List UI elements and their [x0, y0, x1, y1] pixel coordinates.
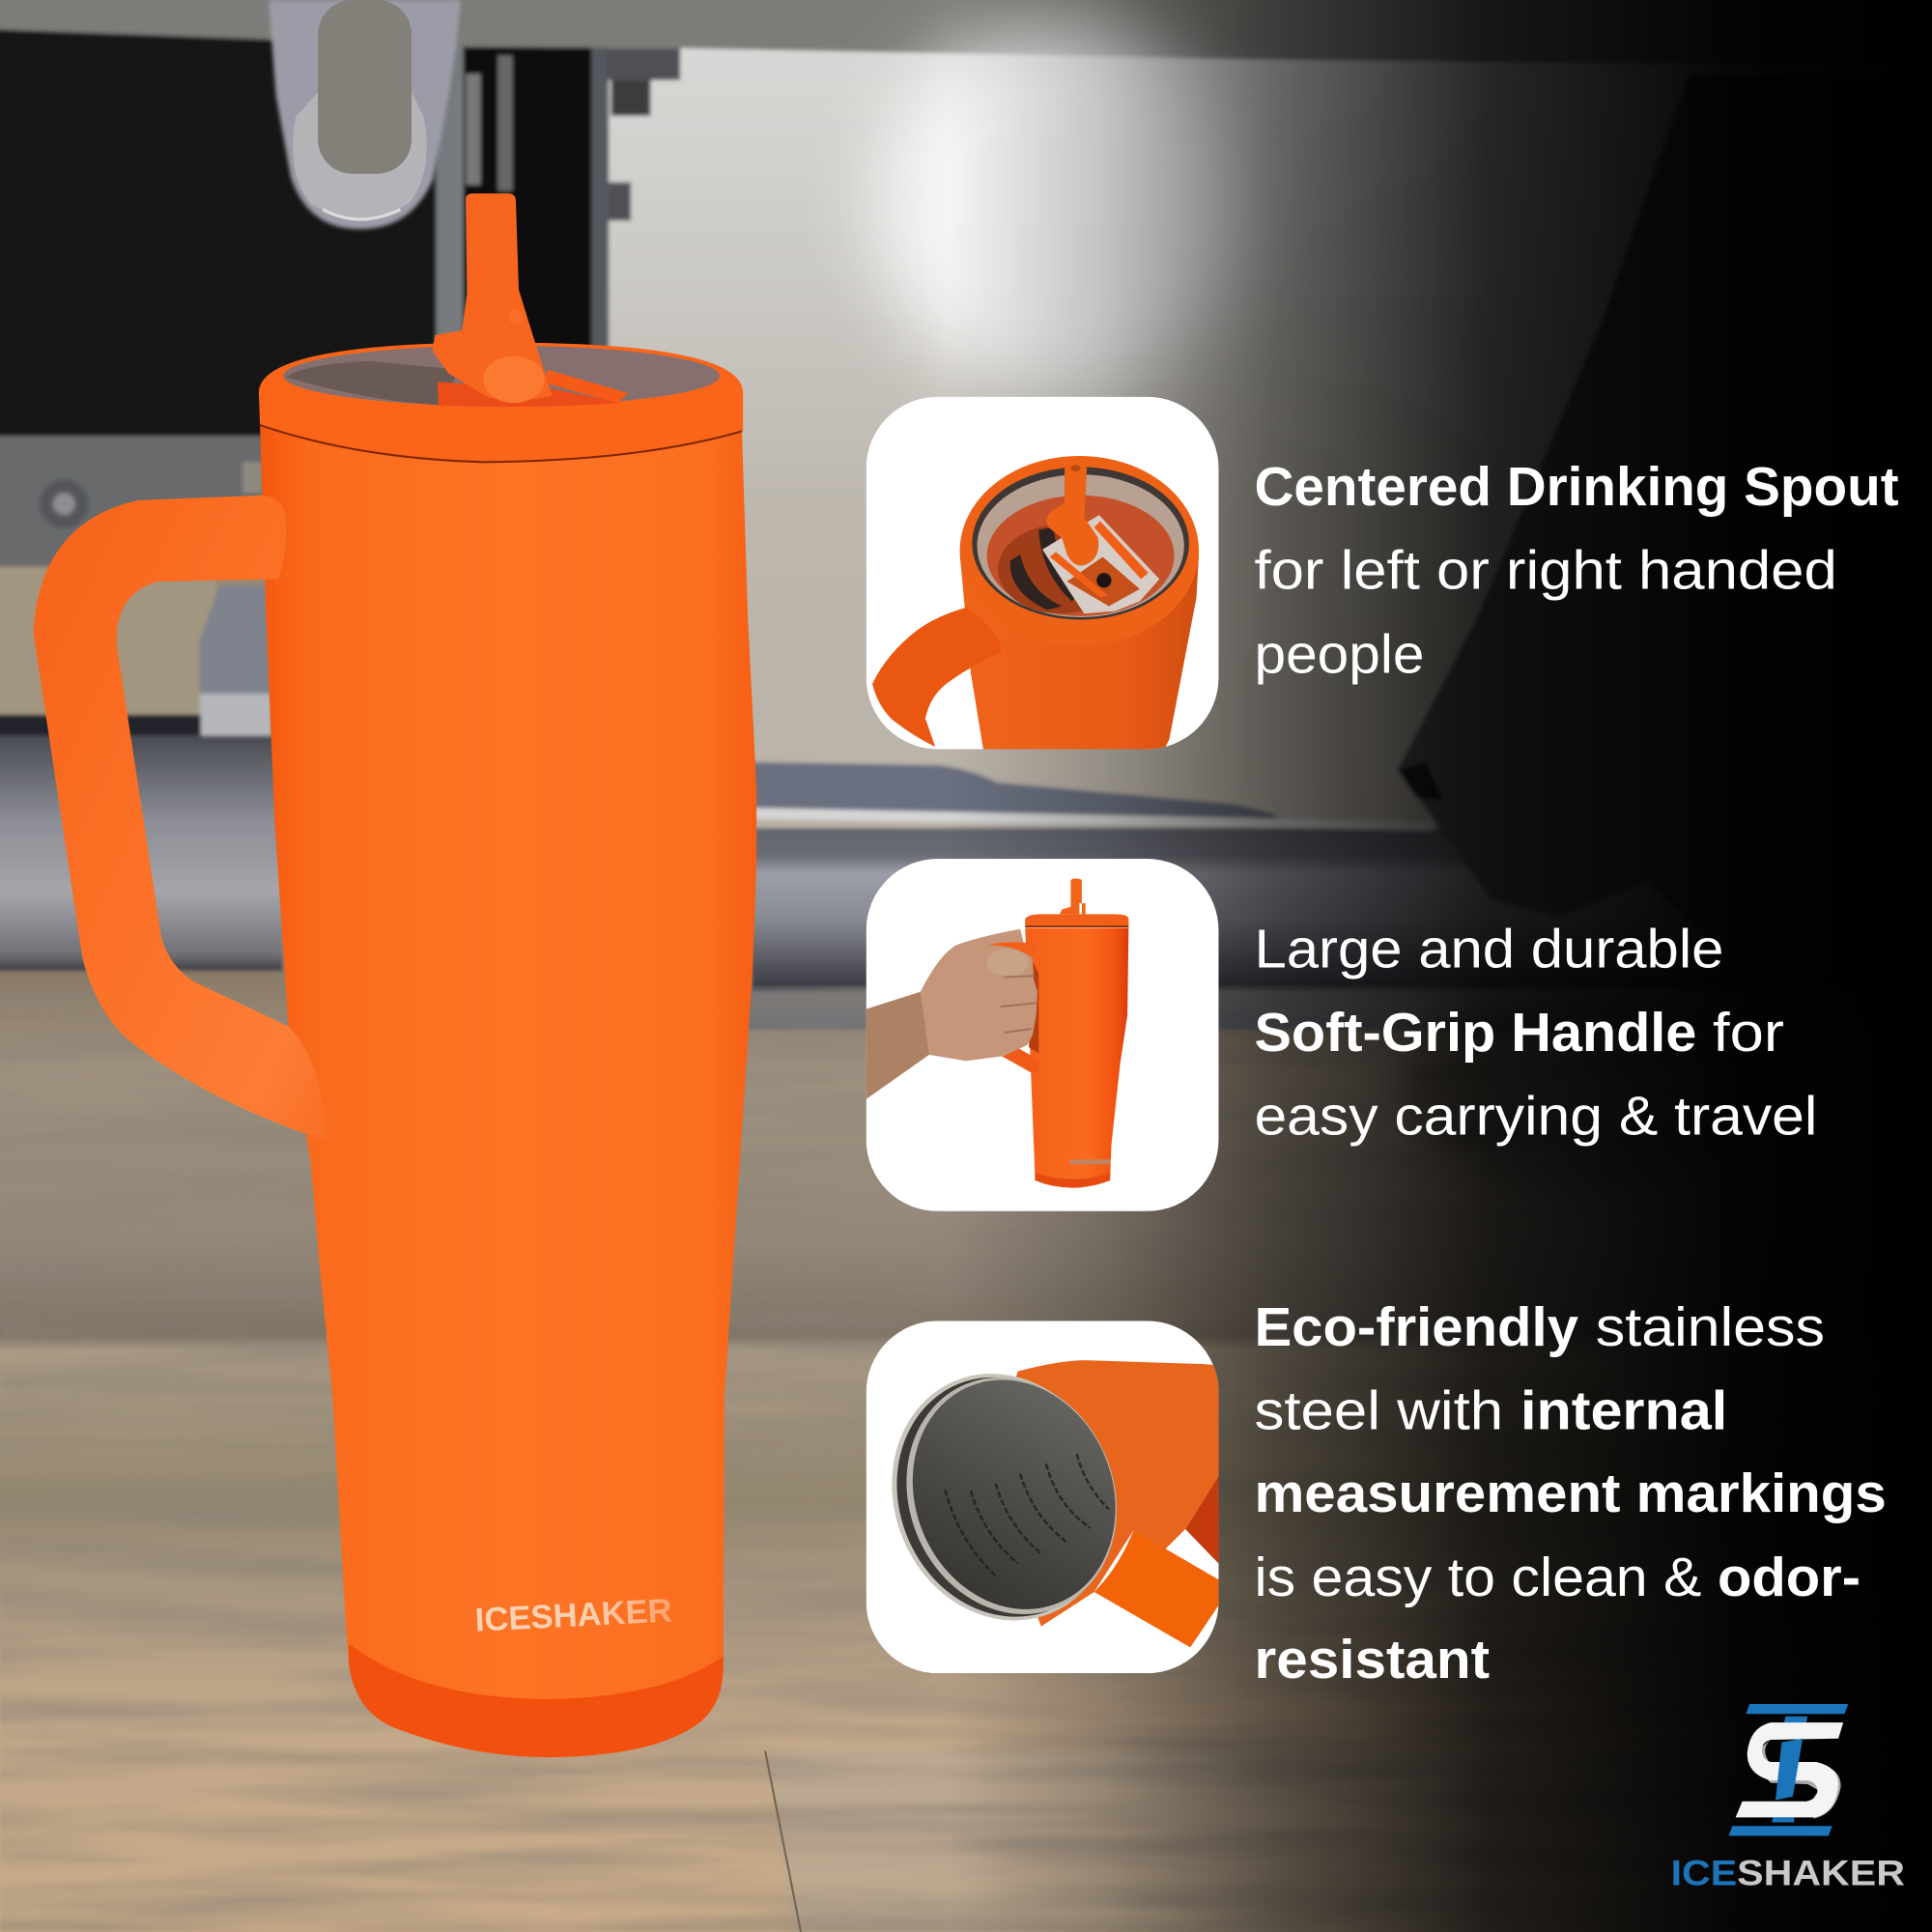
logo S mark — [1736, 1722, 1843, 1817]
hand gripping handle — [867, 929, 1037, 1099]
mini base band — [1035, 1173, 1110, 1188]
logo I mark — [1776, 1739, 1803, 1801]
text: eco-friendly stainless steel: steel with — [1254, 1380, 1503, 1441]
text: soft-grip handle: easy carrying & travel — [1254, 1086, 1817, 1147]
text: eco-friendly stainless steel: resistant — [1254, 1629, 1490, 1690]
panel: internal markings photo — [855, 1321, 1218, 1673]
logo wordmark: ICESHAKER — [1671, 1854, 1905, 1893]
logo top stub — [1784, 1717, 1807, 1722]
straw clip — [545, 370, 629, 403]
logo: Iceshaker — [1671, 1704, 1905, 1893]
mini logo — [1069, 1159, 1110, 1164]
straw spout — [433, 193, 552, 400]
mug lid rim — [960, 456, 1199, 645]
main orange tumbler — [33, 193, 756, 1757]
logo top bar — [1746, 1704, 1848, 1714]
text: soft-grip handle — [1254, 918, 1817, 1147]
text: eco-friendly stainless steel: stainless — [1596, 1296, 1825, 1357]
text: centered drinking spout: for left or right handed — [1254, 540, 1837, 601]
text: eco-friendly stainless steel: internal — [1520, 1380, 1727, 1441]
shadowed back of mug — [1185, 1476, 1218, 1564]
tumbler engraved logo: ICESHAKER — [474, 1592, 673, 1639]
logo bottom stub — [1772, 1817, 1794, 1822]
dark swirl reflections — [1010, 527, 1074, 611]
text: soft-grip handle: Large and durable — [1254, 918, 1723, 979]
panel: soft-grip handle photo — [867, 859, 1218, 1211]
white handle gap — [1164, 1531, 1218, 1578]
steel rim — [855, 1340, 1151, 1654]
text: eco-friendly stainless steel: measurement markings — [1254, 1463, 1887, 1523]
tumbler handle — [33, 496, 327, 1141]
mini straw — [1047, 462, 1098, 565]
tumbler lid — [259, 343, 743, 462]
logo bottom bar — [1729, 1826, 1833, 1836]
lid seam — [260, 425, 742, 462]
mug interior — [879, 1350, 1150, 1640]
mini handle upper — [988, 942, 1037, 956]
mini handle lower — [999, 1047, 1038, 1073]
mug handle — [872, 608, 1002, 747]
text: eco-friendly stainless steel: is easy to clean & — [1254, 1547, 1701, 1607]
text: eco-friendly stainless steel: odor- — [1718, 1547, 1861, 1607]
text: eco-friendly stainless steel — [1254, 1296, 1887, 1690]
text: soft-grip handle: Soft-Grip Handle — [1254, 1002, 1696, 1063]
mini tumbler body — [1025, 927, 1128, 1186]
measurement markings — [945, 1454, 1109, 1576]
mug handle — [1094, 1530, 1218, 1647]
tumbler base band — [349, 1644, 724, 1757]
text: centered drinking spout: people — [1254, 623, 1424, 684]
spout mechanism — [1042, 515, 1159, 613]
logo S shadow — [1758, 1740, 1841, 1819]
text: eco-friendly stainless steel: Eco-friendly — [1254, 1296, 1578, 1357]
tumbler body — [260, 425, 756, 1757]
mug body from above — [960, 554, 1199, 750]
mini tumbler straw — [1060, 878, 1086, 914]
lid window — [283, 346, 720, 406]
knuckle shading — [1001, 976, 1037, 1033]
mini tumbler lid — [1025, 914, 1128, 926]
text: soft-grip handle: for — [1713, 1002, 1784, 1063]
clear lid window — [972, 467, 1189, 620]
mug body side — [985, 1360, 1218, 1627]
gym bracket with clear cylinder — [269, 0, 461, 229]
text: centered drinking spout: Centered Drinking Spout — [1254, 456, 1899, 517]
text: centered drinking spout — [1254, 456, 1899, 684]
panel: centered drinking spout photo — [867, 397, 1218, 750]
